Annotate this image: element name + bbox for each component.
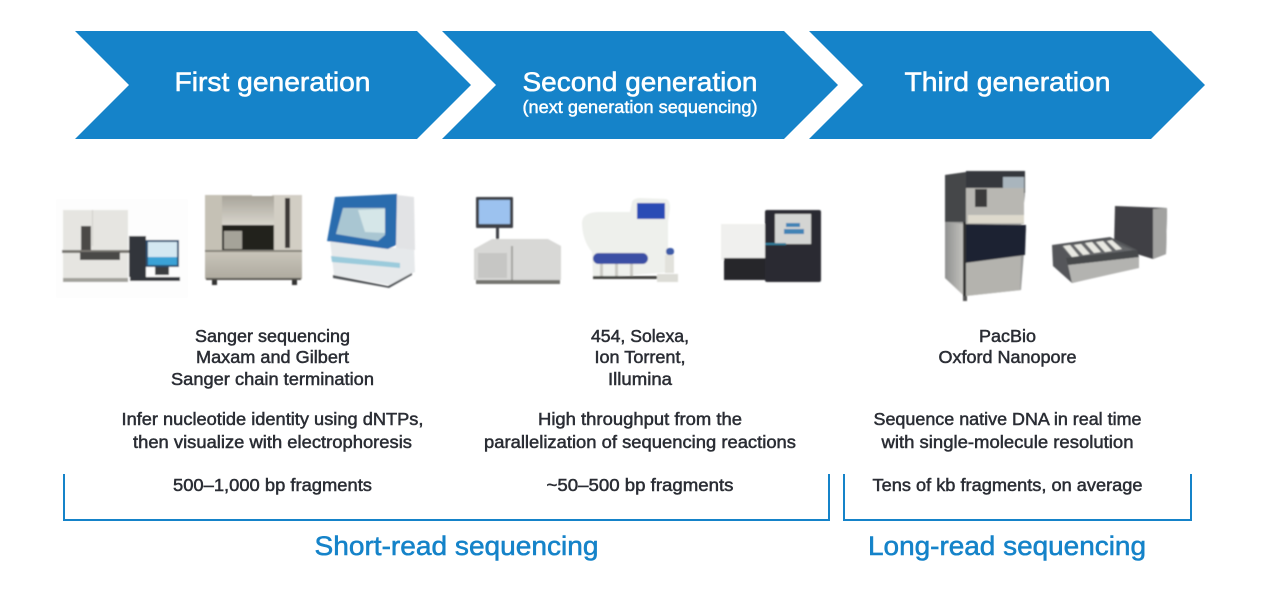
text block: second generation methods: Illumina xyxy=(608,369,672,389)
text block: first generation methods: Sanger sequencing xyxy=(195,326,350,346)
text block: first generation description xyxy=(122,409,424,452)
subheading: next generation sequencing: (next generation sequencing) xyxy=(522,97,758,117)
text block: first generation methods xyxy=(171,326,374,389)
text block: second generation methods: Ion Torrent, xyxy=(594,347,686,367)
text block: third generation description xyxy=(874,409,1142,452)
label: short-read sequencing: Short-read sequencing xyxy=(314,531,598,561)
text: first generation fragment size: 500–1,000 bp fragments xyxy=(173,475,372,495)
text block: second generation methods: 454, Solexa, xyxy=(591,326,689,346)
arrow: third generation xyxy=(809,31,1205,139)
heading: second generation: Second generation xyxy=(522,67,758,97)
icon: Illumina benchtop sequencer xyxy=(721,210,821,282)
text: third generation fragment size: Tens of kb fragments, on average xyxy=(872,475,1142,495)
text block: third generation description: with single-molecule resolution xyxy=(880,432,1134,452)
icon: Solexa sequencer xyxy=(582,198,678,282)
heading: third generation: Third generation xyxy=(904,67,1110,97)
text block: second generation methods xyxy=(591,326,689,389)
bracket: short-read xyxy=(64,474,829,520)
arrow: first generation xyxy=(75,31,471,139)
text block: second generation description xyxy=(484,409,796,452)
label: long-read sequencing: Long-read sequencing xyxy=(868,531,1146,561)
text: second generation fragment size: ~50–500 bp fragments xyxy=(546,475,734,495)
text block: second generation description: parallelization of sequencing reactions xyxy=(484,432,796,452)
heading: first generation: First generation xyxy=(174,67,370,97)
icon: 454 sequencer with monitor xyxy=(474,197,561,284)
text block: first generation methods: Sanger chain termination xyxy=(171,369,374,389)
text block: third generation methods: Oxford Nanopore xyxy=(938,347,1076,367)
text block: third generation description: Sequence native DNA in real time xyxy=(874,409,1142,429)
icon: blue-lid sequencer xyxy=(327,194,415,288)
icon: steel sequencer xyxy=(205,195,302,285)
text block: third generation methods xyxy=(938,326,1076,367)
text block: first generation methods: Maxam and Gilbert xyxy=(196,347,349,367)
text block: third generation methods: PacBio xyxy=(979,326,1036,346)
bracket: long-read xyxy=(844,474,1191,520)
text block: first generation description: Infer nucleotide identity using dNTPs, xyxy=(122,409,424,429)
icon: capillary sequencer with computer xyxy=(56,199,188,298)
icon: Oxford Nanopore devices xyxy=(1052,206,1167,283)
text block: second generation description: High throughput from the xyxy=(538,409,742,429)
icon: PacBio sequencer xyxy=(945,171,1026,301)
arrow: second generation xyxy=(442,31,838,139)
text block: first generation description: then visualize with electrophoresis xyxy=(133,432,412,452)
